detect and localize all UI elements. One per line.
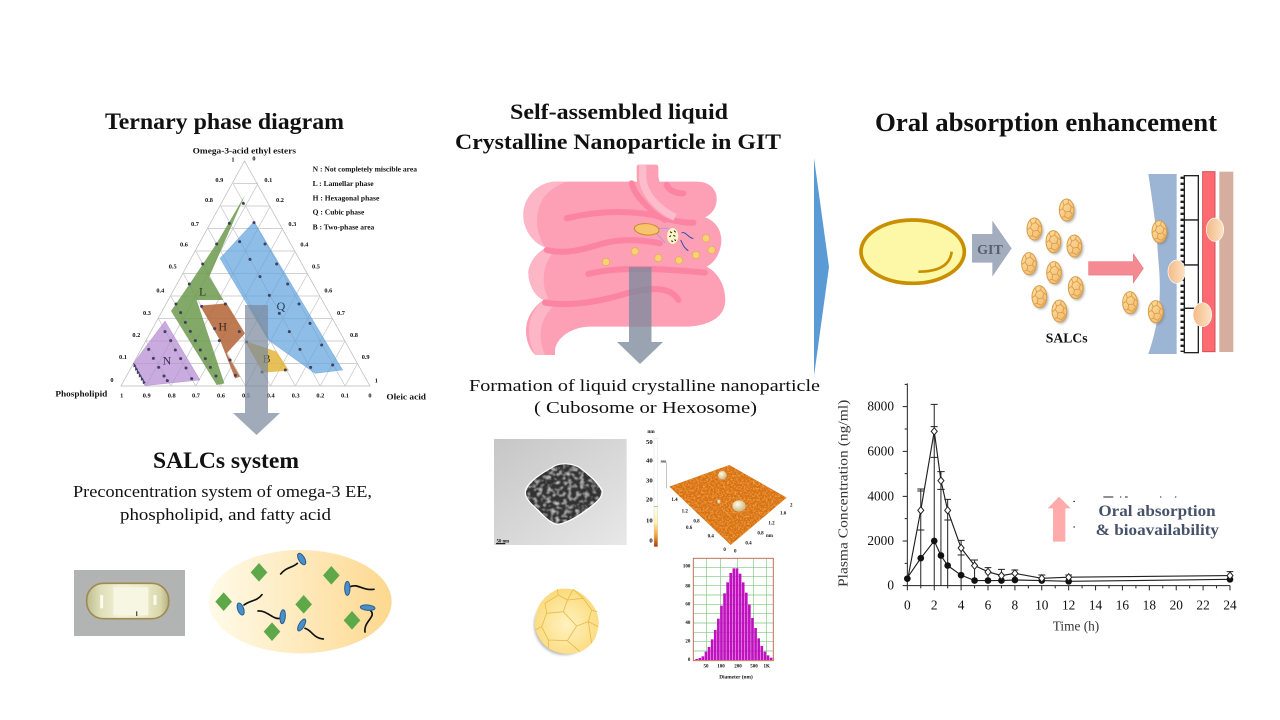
tick labels: 0.7 (337, 310, 346, 317)
chart: AFM surface: 1.2 (768, 521, 775, 526)
callout: oral absorption and bioavailability: Oral absorption (1098, 503, 1216, 520)
x tick labels: 2 (931, 597, 938, 612)
region B (245, 341, 289, 373)
lipid heads (236, 552, 375, 632)
tick labels: 0.6 (324, 287, 332, 294)
panel: oral absorption enhancement (836, 108, 1237, 634)
panel: SALCs system (73, 448, 392, 653)
caption: formation of nanoparticle (469, 376, 820, 417)
legend: N : Not completely miscible area (313, 165, 418, 173)
markers: control (904, 538, 1233, 585)
yellow nanoparticles (602, 235, 715, 266)
heading: self-assembled nanoparticle: Self-assembled liquid (510, 99, 728, 124)
tick labels: 0 (368, 392, 372, 399)
intestinal wall (1148, 172, 1233, 354)
arrow: intestine to nanoparticle (617, 267, 663, 364)
heading: self-assembled nanoparticle: Crystalline Nanoparticle in GIT (455, 129, 781, 154)
image: TEM micrograph (494, 439, 627, 545)
y tick labels: 0 (887, 577, 894, 592)
x tick labels: 4 (958, 597, 965, 612)
arrow: ternary to SALCs system (233, 305, 280, 435)
tick labels: 0.1 (264, 177, 272, 184)
photo: soft capsule (74, 570, 185, 636)
diagram: absorption pathway (861, 172, 1233, 354)
x tick labels: 18 (1143, 597, 1156, 612)
legend: Q : Cubic phase (313, 209, 364, 217)
legend: H : Hexagonal phase (313, 194, 379, 202)
tick labels: 0.4 (267, 392, 275, 399)
tick labels: 0.3 (292, 392, 300, 399)
absorbed particles (1123, 218, 1224, 327)
tick labels: 0.2 (316, 392, 324, 399)
x tick labels: 6 (985, 597, 992, 612)
tick labels: 0.1 (119, 354, 127, 361)
panel: self-assembled nanoparticle in GIT (455, 99, 820, 681)
region H (200, 303, 245, 378)
tick labels: 0.5 (242, 392, 250, 399)
series: control line (907, 541, 1230, 581)
tick labels: 0.9 (143, 392, 151, 399)
description (73, 482, 372, 524)
chart: size distribution histogram: 80 (685, 584, 691, 589)
x tick labels: 8 (1012, 597, 1019, 612)
axis titles: Oleic acid (386, 391, 426, 401)
phase labels: H (218, 320, 227, 334)
chart: AFM surface: 0.6 (686, 526, 693, 531)
y tick labels: 2000 (867, 533, 894, 548)
tick labels: 0.4 (156, 287, 165, 294)
tick labels: 0.5 (312, 263, 320, 270)
phase labels: N (163, 354, 172, 368)
region N (133, 321, 200, 386)
capsule (861, 220, 964, 283)
phase labels: L (199, 285, 206, 299)
x tick labels: 0 (904, 597, 911, 612)
illustration: intestine (523, 165, 725, 355)
chart: AFM surface: 0.4 (708, 535, 714, 540)
chart: AFM surface: nm (766, 534, 774, 539)
description: Preconcentration system of omega-3 EE, (73, 482, 372, 501)
x tick labels: 10 (1035, 597, 1049, 612)
tick labels: 0.6 (217, 392, 225, 399)
tick labels: 0.2 (276, 197, 284, 204)
axis titles: Plasma Concentration (ng/ml) (836, 400, 851, 587)
region L (171, 195, 245, 385)
tick labels: 0.8 (205, 197, 213, 204)
tick labels: 0.2 (132, 332, 140, 339)
chart: AFM surface: nm (661, 459, 667, 464)
image: TEM micrograph: 50 nm (497, 539, 509, 544)
tick labels: 0 (252, 155, 256, 162)
illustration: cubosome sphere (534, 589, 599, 655)
arrow: GIT: GIT (977, 243, 1003, 258)
tick labels (110, 155, 378, 399)
chart: AFM surface: 0 (649, 537, 653, 544)
tick labels: 0.3 (288, 221, 296, 228)
chart: AFM surface: 0 (723, 548, 726, 553)
chart: size distribution histogram: 40 (685, 621, 691, 626)
chart: AFM surface: nm (647, 429, 655, 435)
tick labels: 0.9 (215, 177, 223, 184)
chart: size distribution histogram: 200 (734, 664, 742, 669)
capsule and particle detail (634, 223, 693, 251)
chart: AFM surface: 20 (646, 497, 653, 504)
tick labels: 0 (110, 377, 114, 384)
chart: size distribution histogram: 0 (688, 658, 691, 663)
axis titles (55, 147, 426, 401)
heading: SALCs system: SALCs system (153, 448, 299, 473)
heading: self-assembled nanoparticle (455, 99, 781, 154)
chart: AFM surface (646, 429, 793, 554)
chart: size distribution histogram: 20 (685, 640, 691, 645)
series: SALCs line (907, 431, 1230, 581)
legend: L : Lamellar phase (313, 180, 374, 188)
axis titles: Omega-3-acid ethyl esters (193, 147, 296, 156)
callout: oral absorption and bioavailability: & bioavailability (1096, 522, 1219, 539)
heading: ternary phase diagram: Ternary phase diagram (105, 109, 344, 134)
clipped legend remnants (1073, 497, 1176, 527)
legend (313, 165, 418, 231)
tick labels: 0.1 (341, 392, 349, 399)
legend: B : Two-phase area (313, 223, 375, 231)
tick labels: 0.5 (169, 263, 177, 270)
tick labels: 0.6 (180, 241, 188, 248)
label: SALCs: SALCs (1046, 330, 1088, 345)
chart: ternary grid (121, 161, 370, 386)
x tick labels: 12 (1062, 597, 1075, 612)
x tick labels: 22 (1196, 597, 1210, 612)
arrow: GIT (972, 221, 1012, 277)
error bars (917, 404, 1233, 586)
tick labels: 0.4 (300, 241, 309, 248)
y tick labels: 8000 (867, 399, 894, 414)
y tick labels: 4000 (867, 488, 894, 503)
panel: ternary phase diagram (55, 109, 426, 401)
chart: phase regions and labels (55, 147, 426, 401)
chart: AFM surface: 40 (646, 457, 653, 464)
chart: size distribution histogram: 1K (763, 664, 770, 669)
arrow: increase (1048, 497, 1071, 542)
tick labels: 0.7 (191, 221, 200, 228)
y tick labels: 6000 (867, 443, 894, 458)
description: phospholipid, and fatty acid (120, 505, 332, 524)
chart: AFM surface: 1.4 (671, 498, 678, 503)
tick labels: 1 (375, 377, 378, 384)
chart: AFM surface: 10 (646, 517, 653, 524)
diamonds: omega-3 ethyl esters (215, 563, 360, 641)
chart: size distribution histogram: 100 (683, 564, 691, 569)
tick labels: 0.7 (192, 392, 201, 399)
x tick labels: 14 (1089, 597, 1103, 612)
chart: AFM surface: 0.8 (757, 531, 764, 536)
callout: oral absorption and bioavailability (1096, 503, 1219, 539)
caption: formation of nanoparticle: ( Cubosome or Hexosome) (534, 398, 757, 417)
tick labels: 0.8 (350, 332, 358, 339)
phase labels (163, 285, 286, 368)
x tick labels: 24 (1223, 597, 1237, 612)
region Q (220, 222, 343, 373)
chart: plasma concentration (836, 383, 1237, 634)
chart: size distribution histogram: 500 (750, 664, 758, 669)
diagram: lipid mixture ellipse (209, 550, 392, 653)
chart: AFM surface: 30 (646, 477, 653, 484)
chart: size distribution histogram (683, 558, 773, 681)
chart: AFM surface: 0 (734, 549, 737, 554)
chart: AFM surface: 0.8 (693, 519, 700, 524)
heading: oral absorption enhancement: Oral absorption enhancement (875, 108, 1217, 137)
caption: formation of nanoparticle: Formation of liquid crystalline nanoparticle (469, 376, 820, 395)
measurement points (134, 202, 334, 383)
markers: SALCs (918, 428, 1233, 582)
chart: AFM surface: 1.6 (780, 511, 787, 516)
phase labels: Q (277, 299, 286, 313)
tick labels: 1 (120, 392, 123, 399)
tick labels: 0.8 (168, 392, 176, 399)
chart: AFM surface: 0.4 (745, 541, 752, 546)
x tick labels (904, 597, 1237, 612)
x tick labels: 20 (1170, 597, 1183, 612)
chart: AFM surface: 1.2 (682, 509, 688, 514)
axis titles: Phospholipid (55, 389, 108, 399)
chart: AFM surface: 50 (646, 439, 653, 446)
tick labels: 1 (231, 157, 235, 164)
lipid tails (244, 563, 374, 639)
phase labels: B (263, 352, 271, 366)
chart: size distribution histogram: 60 (685, 602, 691, 607)
chart: AFM surface: 2 (790, 503, 793, 508)
x tick labels: 16 (1116, 597, 1129, 612)
chart: size distribution histogram: 50 (704, 664, 709, 669)
tick labels: 0.3 (143, 310, 151, 317)
chart: plasma concentration: Time (h) (1053, 619, 1099, 634)
arrow: pink (1089, 254, 1143, 283)
tick labels: 0.9 (362, 354, 370, 361)
y tick labels (867, 399, 894, 592)
chart: size distribution histogram: 100 (717, 664, 725, 669)
divider arrow: blue chevron (814, 158, 829, 376)
SALCs particles (1022, 199, 1085, 324)
chart: size distribution histogram: Diameter (nm) (719, 674, 753, 681)
axes (903, 383, 1230, 590)
